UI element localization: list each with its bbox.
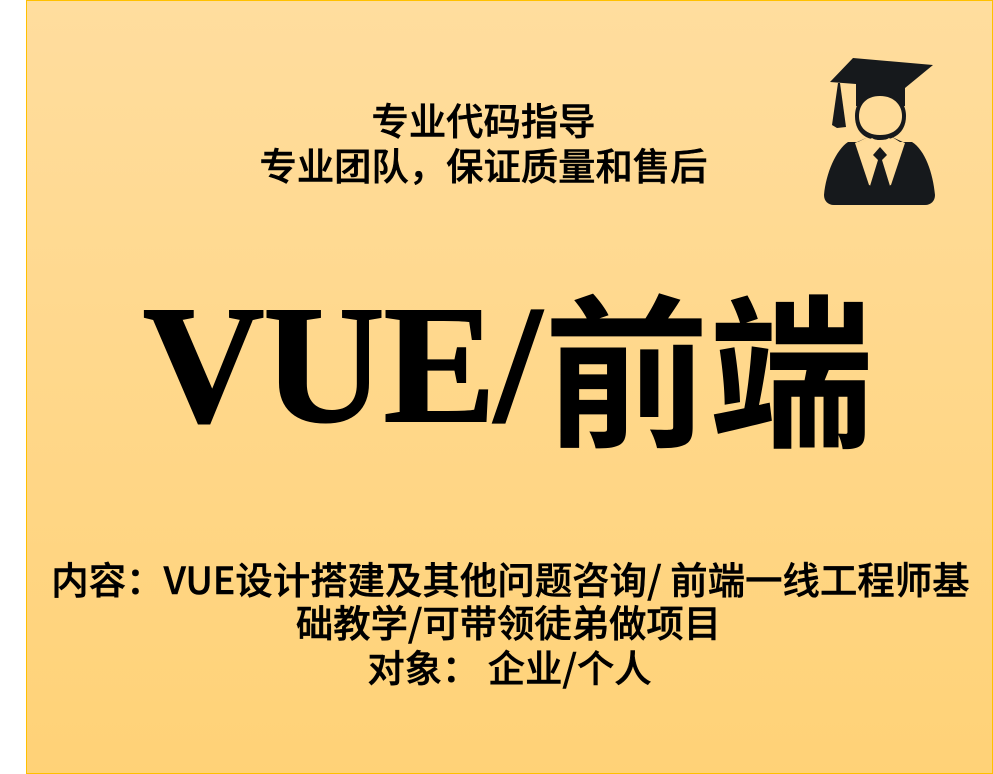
description line 1: 内容：VUE设计搭建及其他问题咨询/ 前端一线工程师基 bbox=[51, 551, 970, 605]
audience line: 对象： 企业/个人 bbox=[367, 639, 652, 693]
subheading line 2: 专业团队，保证质量和售后 bbox=[260, 137, 707, 191]
main title: 前端 bbox=[544, 243, 874, 482]
subheading line 1: 专业代码指导 bbox=[372, 92, 595, 146]
main title bbox=[143, 243, 874, 482]
icon: graduate with mortarboard bbox=[824, 58, 935, 205]
main title: VUE/ bbox=[143, 272, 540, 458]
description line 2: 础教学/可带领徒弟做项目 bbox=[296, 594, 721, 648]
